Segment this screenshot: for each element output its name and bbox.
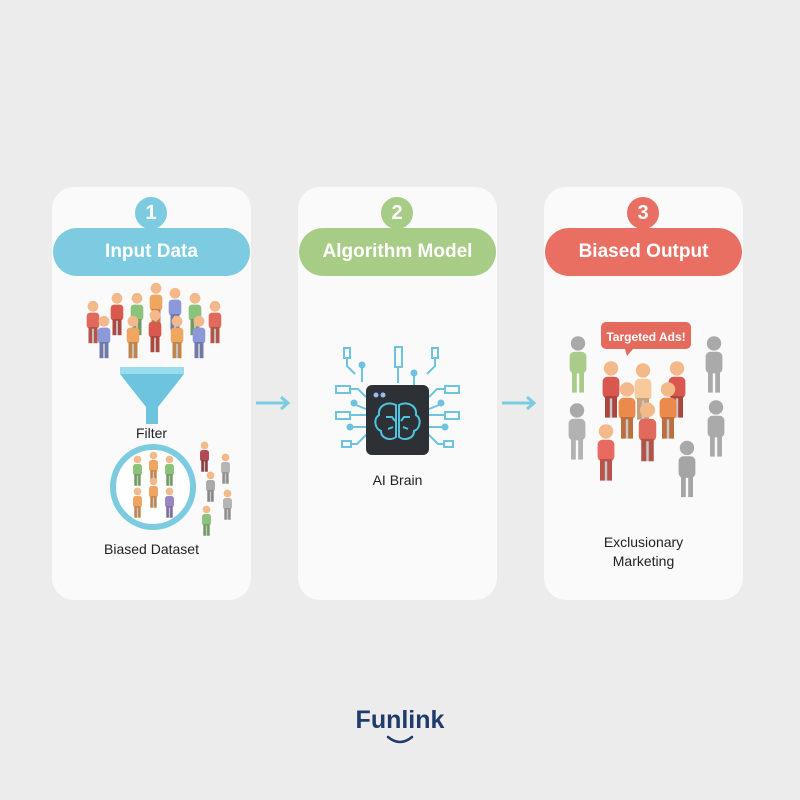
biased dataset circle <box>113 442 232 536</box>
heading: Biased Output: Biased Output <box>579 241 708 262</box>
step number 1: 1 <box>145 202 157 224</box>
heading: Input Data <box>53 228 250 276</box>
panel: biased output <box>544 187 743 600</box>
heading: Algorithm Model: Algorithm Model <box>323 241 472 262</box>
step number 2 <box>378 194 416 232</box>
crowd with targeted ads bubble <box>568 322 724 498</box>
icon: filter funnel <box>120 367 184 424</box>
heading: Algorithm Model <box>299 228 496 276</box>
icon: AI brain chip <box>335 346 460 455</box>
heading: Biased Output <box>545 228 742 276</box>
logo: Funlink: Funlink <box>356 706 444 734</box>
step number 2: 2 <box>391 202 403 224</box>
label: Biased Dataset: Biased Dataset <box>104 541 199 557</box>
label: Exclusionary Marketing <box>604 534 684 569</box>
label: Exclusionary Marketing: Marketing <box>613 553 674 569</box>
label: Exclusionary Marketing: Exclusionary <box>604 534 683 550</box>
step number 3: 3 <box>637 202 649 224</box>
step number 1 <box>132 194 170 232</box>
heading: Input Data: Input Data <box>105 241 198 262</box>
label: Filter: Filter <box>136 425 167 441</box>
step number 3 <box>624 194 662 232</box>
crowd illustration <box>86 282 232 536</box>
label: AI Brain: AI Brain <box>373 472 422 488</box>
panel: input data <box>52 187 251 600</box>
crowd with targeted ads bubble: Targeted Ads! <box>606 330 686 344</box>
panel: algorithm model <box>298 187 497 600</box>
